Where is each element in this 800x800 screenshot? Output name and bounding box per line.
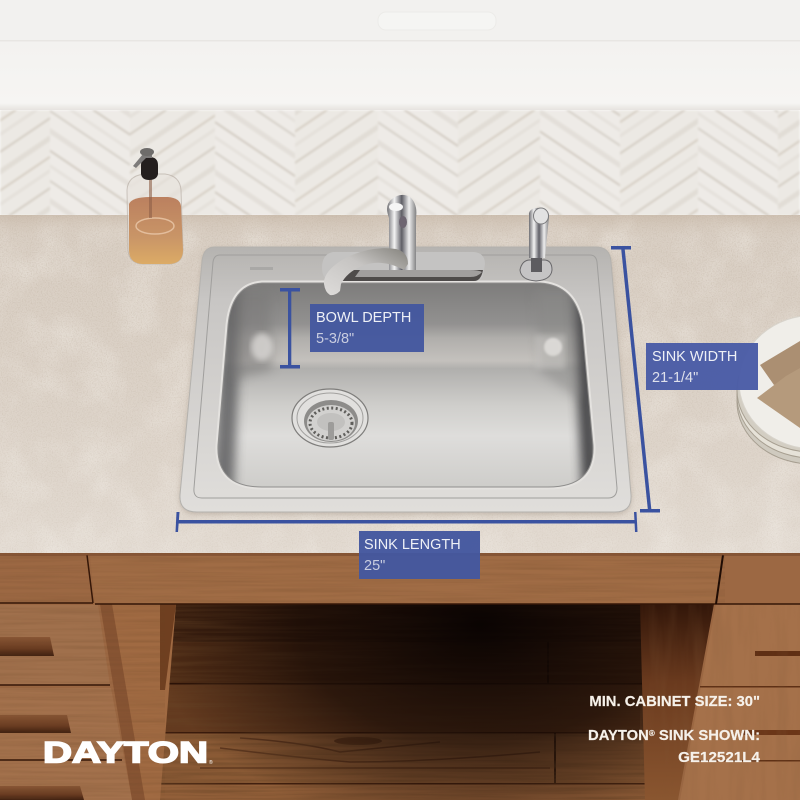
callout: sink length: SINK LENGTH	[364, 537, 461, 553]
faucet deck plate	[322, 252, 485, 281]
callout: bowl depth	[310, 304, 424, 352]
callout: sink width: 21-1/4"	[652, 370, 698, 386]
cabinet base	[0, 553, 800, 800]
dimension arrow: sink length	[176, 512, 638, 532]
soap sprayer	[520, 208, 552, 281]
left stile	[100, 604, 176, 800]
callout: sink length: 25"	[364, 558, 385, 574]
product info text: MIN. CABINET SIZE: 30"	[589, 694, 760, 710]
napkins	[757, 341, 800, 428]
tiled backsplash	[0, 110, 800, 216]
left drawers	[0, 605, 110, 685]
product info text: GE12521L4	[678, 749, 761, 766]
top rail	[90, 555, 722, 604]
right drawers	[680, 604, 800, 800]
brand logo: Dayton: DAYTON	[43, 736, 208, 770]
brand logo: Dayton: ®	[209, 759, 213, 766]
product info text: DAYTON	[588, 728, 649, 744]
callout: bowl depth: 5-3/8"	[316, 331, 354, 347]
dimension arrow: bowl depth	[280, 288, 300, 368]
wood grain	[0, 555, 165, 800]
countertop	[0, 215, 800, 555]
rim	[180, 247, 631, 512]
sink shadow	[180, 249, 631, 514]
product info text	[588, 694, 761, 766]
soap bottle	[127, 148, 183, 264]
ceiling shelf	[0, 0, 800, 110]
product info text: ®	[649, 729, 655, 738]
bowl	[212, 283, 600, 490]
right stile	[640, 604, 714, 800]
plates	[737, 315, 800, 464]
callout: sink width	[646, 343, 758, 390]
faucet body	[387, 195, 416, 270]
faucet	[322, 195, 485, 295]
logo plate	[250, 267, 273, 270]
callout: bowl depth: BOWL DEPTH	[316, 310, 411, 326]
callout: sink width: SINK WIDTH	[652, 349, 737, 365]
drain strainer	[292, 389, 368, 447]
open cabinet interior	[160, 604, 645, 800]
dimension arrow: sink width	[611, 246, 660, 512]
inner rim ridge	[194, 255, 617, 498]
product info text: SINK SHOWN:	[655, 728, 760, 744]
callout: sink length	[359, 531, 480, 579]
faucet spout	[324, 248, 408, 295]
stainless steel sink	[180, 247, 631, 514]
